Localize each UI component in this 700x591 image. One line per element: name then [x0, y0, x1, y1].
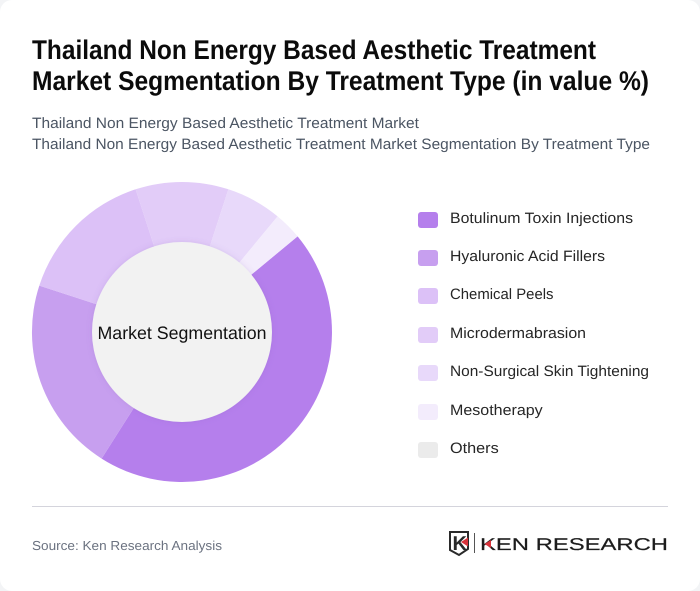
- legend item: Others: Others: [450, 440, 499, 457]
- subtitle: [32, 115, 650, 153]
- slice: Microdermabrasion: [136, 182, 228, 332]
- source note: Source: Ken Research Analysis: [32, 538, 223, 553]
- title: Market Segmentation By Treatment Type (in value %): [32, 66, 649, 96]
- donut centre: [92, 242, 272, 422]
- slice: Mesotherapy: [182, 216, 298, 332]
- legend item: Mesotherapy: Mesotherapy: [450, 402, 543, 419]
- legend item: Chemical Peels: Chemical Peels: [450, 286, 554, 303]
- title: Thailand Non Energy Based Aesthetic Treatment: [32, 35, 596, 65]
- donut chart: [32, 182, 332, 482]
- slice: Non-Surgical Skin Tightening: [182, 189, 278, 332]
- legend item: Microdermabrasion: Microdermabrasion: [450, 325, 586, 342]
- subtitle: Thailand Non Energy Based Aesthetic Treatment Market: [32, 115, 420, 132]
- legend item: Botulinum Toxin Injections: Botulinum Toxin Injections: [450, 210, 633, 227]
- wordmark: KEN RESEARCH: [480, 535, 668, 554]
- icon: shield: K: [452, 533, 468, 555]
- legend item: Mesotherapy: [418, 402, 543, 420]
- legend item: Non-Surgical Skin Tightening: Non-Surgical Skin Tightening: [450, 363, 649, 380]
- centre label: Market Segmentation: [98, 323, 266, 343]
- slice: Chemical Peels: [39, 189, 182, 332]
- subtitle: Thailand Non Energy Based Aesthetic Treatment Market Segmentation By Treatment Type: [32, 136, 650, 153]
- legend: [418, 210, 649, 458]
- legend item: Hyaluronic Acid Fillers: Hyaluronic Acid Fillers: [450, 248, 605, 265]
- legend item: Others: [418, 440, 499, 458]
- title: [32, 35, 649, 96]
- slice: Botulinum Toxin Injections: [102, 236, 332, 482]
- slice: Hyaluronic Acid Fillers: [32, 286, 182, 459]
- logo: Ken Research: [450, 532, 668, 555]
